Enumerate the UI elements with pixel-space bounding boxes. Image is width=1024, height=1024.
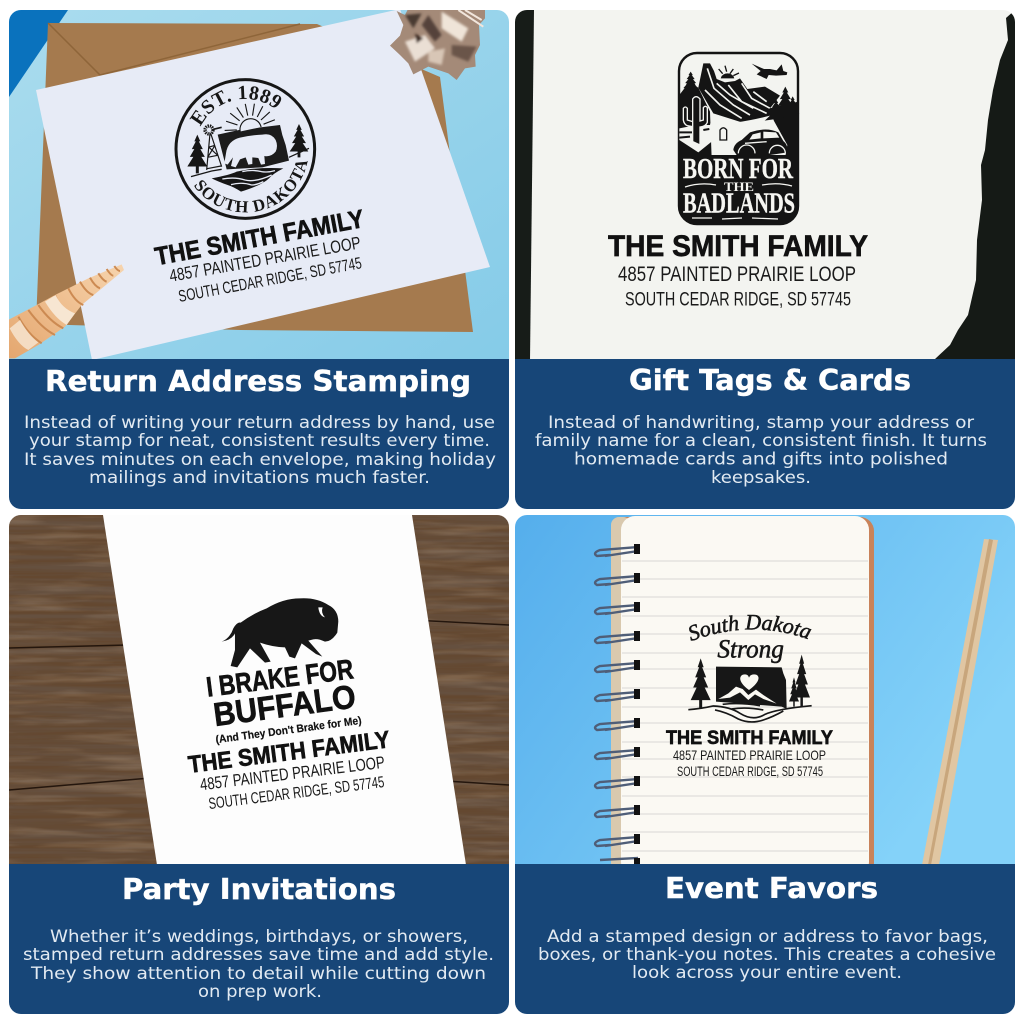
badge: vintage car [733, 129, 787, 155]
seal trees [187, 135, 207, 173]
description: Instead of handwriting, stamp your address or [548, 413, 974, 433]
photo: white card on wood table [9, 515, 509, 865]
description [24, 413, 496, 488]
badge: left hills and ground [679, 73, 712, 158]
description [23, 927, 494, 1002]
description: boxes, or thank-you notes. This creates a cohesive [538, 945, 996, 965]
description: look across your entire event. [632, 963, 902, 983]
badge: saguaro cactus [683, 97, 707, 145]
panel: party invitations [9, 515, 509, 1014]
description: They show attention to detail while cutting down [30, 964, 486, 984]
heading: Return Address Stamping [45, 365, 471, 398]
panel: return address stamping [9, 10, 509, 509]
description: keepsakes. [711, 468, 811, 488]
photo: spiral notebook and pencil [515, 515, 1015, 877]
description: homemade cards and gifts into polished [574, 450, 948, 470]
stamp script: South Dakota: South Dakota [689, 614, 812, 641]
caption box [9, 864, 509, 1014]
seal windmill [205, 126, 222, 170]
stamp: waves [688, 704, 812, 722]
stamp text: street address: 4857 PAINTED PRAIRIE LOOP [168, 232, 362, 286]
stamp text: the smith family: THE SMITH FAMILY [153, 205, 366, 271]
stamp text: city line: SOUTH CEDAR RIDGE, SD 57745 [625, 288, 851, 310]
stamp text: the smith family: THE SMITH FAMILY [187, 726, 391, 779]
seal ground and waves [191, 148, 309, 177]
stamp text: street address: 4857 PAINTED PRAIRIE LOOP [199, 753, 386, 794]
description: family name for a clean, consistent finish. It turns [535, 431, 987, 451]
heading: Event Favors [665, 872, 878, 905]
caption box [9, 359, 509, 509]
pencil [922, 539, 998, 865]
badge text: BORN FOR: BORN FOR [683, 153, 794, 185]
stamp script: Strong: Strong [717, 633, 784, 663]
stamp: bison silhouette [222, 598, 338, 667]
stamp: Born for the Badlands badge [679, 53, 799, 224]
stamp: South Dakota Strong emblem [688, 614, 812, 723]
description: Instead of writing your return address by hand, use [24, 413, 495, 433]
badge: sun [719, 66, 739, 78]
photo: paper on black [515, 10, 1015, 360]
description: mailings and invitations much faster. [89, 468, 430, 488]
description: on prep work. [198, 982, 322, 1002]
panel: gift tags and cards [515, 10, 1015, 509]
stamp text: the smith family: THE SMITH FAMILY [666, 727, 833, 749]
caption box [515, 359, 1015, 509]
icon: cone shell [5, 264, 124, 358]
stamp text: city line: SOUTH CEDAR RIDGE, SD 57745 [177, 254, 363, 306]
description: your stamp for neat, consistent results every time. [29, 431, 490, 451]
badge: mountains [698, 63, 780, 123]
heading: Gift Tags & Cards [629, 364, 911, 397]
badge: scene [679, 63, 799, 158]
stamp text: tagline: (And They Don't Brake for Me) [215, 715, 363, 746]
caption box [515, 864, 1015, 1014]
description: Whether it’s weddings, birthdays, or showers, [50, 927, 468, 947]
badge: plane [752, 64, 787, 79]
seal sun rays [220, 99, 276, 135]
description: Add a stamped design or address to favor bags, [547, 927, 988, 947]
stamp: Est. 1889 South Dakota seal [174, 78, 316, 220]
seal text: EST. 1889: EST. 1889 [190, 86, 282, 126]
photo: envelope and card on blue [5, 8, 509, 360]
panel: event favors [515, 515, 1015, 1014]
description: stamped return addresses save time and add style. [23, 945, 494, 965]
seal state and bison [218, 125, 289, 169]
stamp text: the smith family: THE SMITH FAMILY [608, 230, 868, 263]
badge text: THE: THE [724, 179, 754, 194]
description [538, 927, 996, 983]
stamp: state with heart and mountains [716, 667, 787, 709]
notebook [611, 517, 874, 877]
stamp text: I brake for: I BRAKE FOR [204, 653, 355, 703]
stamp: trees [691, 658, 711, 709]
description [535, 413, 987, 488]
badge text: BADLANDS: BADLANDS [683, 188, 795, 220]
stamp text: street address: 4857 PAINTED PRAIRIE LOOP [618, 263, 856, 286]
stamp text: city line: SOUTH CEDAR RIDGE, SD 57745 [677, 764, 823, 779]
badge: right trees and ground [769, 102, 798, 158]
spiral binding [595, 544, 640, 866]
icon: spiky shell [390, 8, 485, 80]
seal text: SOUTH DAKOTA: SOUTH DAKOTA [194, 161, 308, 212]
stamp text: city line: SOUTH CEDAR RIDGE, SD 57745 [208, 774, 385, 813]
stamp text: buffalo: BUFFALO [211, 678, 358, 733]
description: It saves minutes on each envelope, making holiday [24, 450, 496, 470]
heading: Party Invitations [122, 873, 396, 906]
badge: river [710, 116, 770, 139]
stamp text: street address: 4857 PAINTED PRAIRIE LOOP [673, 747, 826, 763]
